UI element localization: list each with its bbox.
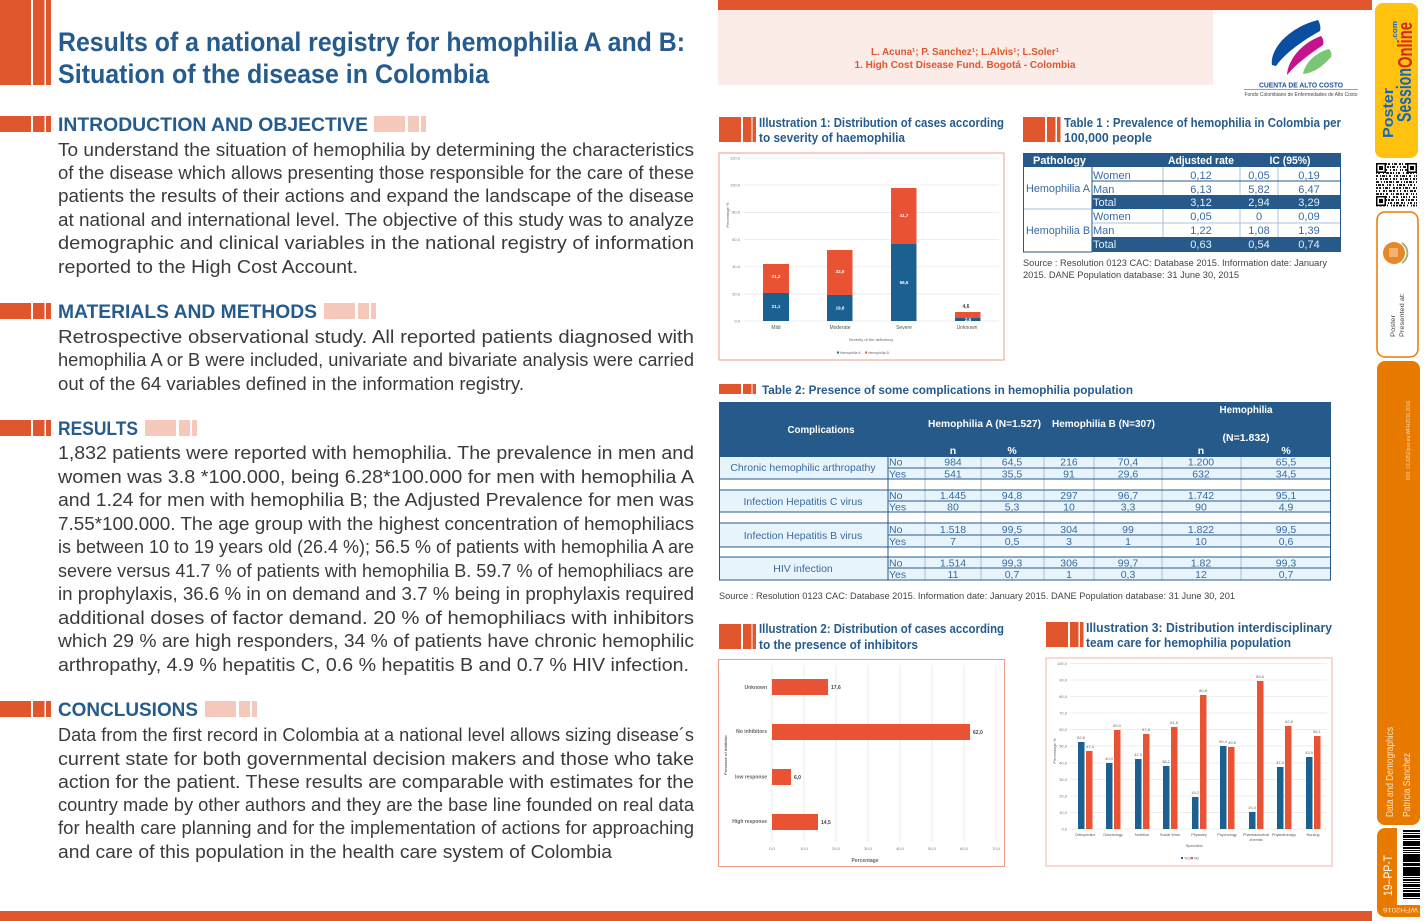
text block: results: 1,832 patients were reported with hemophilia. The prevalence in men and (58, 442, 694, 463)
table 1: prevalence: Women (1093, 170, 1131, 182)
heading: results: RESULTS (58, 418, 138, 440)
table 2: complications: 99,3 (1276, 558, 1296, 570)
table 2: complications: 304 (1060, 524, 1078, 536)
table 1: prevalence: 0,54 (1248, 239, 1270, 251)
heading: results (0, 418, 197, 440)
illustration 3: grouped bar chart: 38,2 (1162, 759, 1171, 764)
authors panel (718, 10, 1213, 85)
illustration 1: stacked bar chart: 120,0 (730, 156, 741, 160)
table 2: complications: 99 (1122, 524, 1134, 536)
text block: introduction: at national and international level. The objective of this study was to analyze (58, 209, 694, 230)
table 1: prevalence: Hemophilia A (1026, 183, 1091, 195)
table 2: complications: 12 (1195, 569, 1207, 581)
illustration 3: grouped bar chart: Social Work (1160, 833, 1180, 837)
table 2: complications: 64,5 (1002, 456, 1022, 468)
sidebar: session panel (1377, 361, 1420, 825)
table 2: complications: % (1281, 445, 1291, 457)
illustration 1: stacked bar chart: Mild (771, 325, 781, 331)
illustration 1: stacked bar chart: 21,2 (772, 274, 781, 279)
text block: materials and methods: hemophilia A or B were included, univariate and bivariate analysis were carried (58, 349, 694, 370)
illustration 3: grouped bar chart: Physiotherapy (1272, 833, 1296, 837)
table 2: complications: 3,3 (1121, 502, 1135, 514)
table 2: complications: 5,3 (1005, 502, 1019, 514)
table 2: complications: 91 (1063, 468, 1075, 480)
sidebar: presented at panel (1377, 212, 1418, 357)
sidebar: poster session online logo: Poster (1380, 88, 1397, 138)
table 1: prevalence: Man (1093, 225, 1114, 237)
table 2: complications: Yes (889, 569, 906, 581)
illustration 1: stacked bar chart (719, 153, 1004, 360)
illustration 1: stacked bar chart: 2,6 (965, 317, 972, 322)
table 2: complications: 1.200 (1188, 456, 1214, 468)
table 1: prevalence: 3,29 (1298, 197, 1320, 209)
table 2: complications: 1.822 (1188, 524, 1214, 536)
illustration 1: stacked bar chart: 100,0 (730, 182, 741, 188)
table 1: prevalence: Pathology (1033, 155, 1087, 167)
bars: hemophilia B (763, 188, 980, 318)
table 2: complications: 1.518 (940, 524, 966, 536)
bars: yes (1078, 742, 1312, 829)
table 2: complications: 1.514 (940, 558, 966, 570)
sidebar: session panel: DOI: 10.3252/pso.eu.WFH2016.2016 (1406, 401, 1412, 480)
table 2: complications: Chronic hemophilic arthropathy (730, 462, 876, 474)
illustration 1: stacked bar chart: 21,1 (772, 304, 781, 309)
illustration 3: grouped bar chart: 61,8 (1170, 720, 1179, 725)
table 2: complications: Hemophilia B (N=307) (1052, 418, 1155, 430)
illustration 3: grouped bar chart: Percentage % (1052, 738, 1057, 764)
illustration 1: stacked bar chart: 40,0 (732, 264, 741, 269)
heading: conclusions (0, 699, 257, 721)
sidebar: qr code (1376, 163, 1417, 206)
illustration 3: grouped bar chart: 60,0 (1059, 727, 1068, 732)
illustration 1: stacked bar chart: Moderate (829, 325, 851, 331)
illustration 2: horizontal bar chart: 6,0 (794, 775, 801, 781)
text block: materials and methods: Retrospective observational study. All reported patients diagnosed with (58, 326, 694, 347)
table 2: complications: 94,8 (1002, 490, 1022, 502)
section: conclusions (0, 699, 695, 862)
logo: cuenta de alto costo: CUENTA DE ALTO COSTO (1259, 80, 1343, 90)
table 2: complications (719, 402, 1331, 581)
table 2: source note: Source : Resolution 0123 CAC: Database 2015. Information date: January 2015. DANE Population database: 31 June 30, 201 (719, 591, 1235, 601)
table 2: complications: 99,3 (1002, 558, 1022, 570)
table 1: prevalence: 5,82 (1248, 184, 1270, 196)
sidebar: poster session online logo: Online (1395, 22, 1417, 68)
table 2: complications: No (889, 456, 903, 468)
illustration 3: grouped bar chart: YES (1184, 856, 1192, 860)
illustration 3: grouped bar chart: 100,0 (1057, 661, 1068, 666)
illustration 2: heading: to the presence of inhibitors (759, 638, 918, 652)
table 1: prevalence: 0,12 (1190, 170, 1212, 182)
illustration 1: stacked bar chart: Unknown (957, 325, 978, 331)
title decoration bars (0, 0, 51, 85)
table 2: complications: 80 (947, 502, 959, 514)
logo: cuenta de alto costo: Fondo Colombiano de Enfermedades de Alto Costo (1244, 92, 1358, 98)
text block: results: additional doses of factor demand. 20 % of hemophiliacs with inhibitors (58, 607, 694, 628)
table 2: complications: 95,1 (1276, 490, 1296, 502)
illustration 2: heading: Illustration 2: Distribution of cases according (759, 622, 1004, 636)
table 2: complications: No (889, 558, 903, 570)
table 1: prevalence: 0,05 (1248, 170, 1270, 182)
illustration 3: grouped bar chart: 40,0 (1105, 756, 1114, 761)
illustration 3: grouped bar chart: 89,6 (1256, 674, 1265, 679)
text block: introduction: To understand the situation of hemophilia by determining the characteristics (58, 139, 694, 160)
text block: conclusions: and care of this population in the health care system of Colombia (58, 841, 613, 862)
table 2: complications: 632 (1192, 468, 1210, 480)
table 2: complications: % (1007, 445, 1017, 457)
illustration 3: grouped bar chart: 80,8 (1199, 688, 1208, 693)
table 2: complications: 90 (1195, 502, 1207, 514)
table 2: complications: 3 (1066, 536, 1072, 548)
section: introduction and objective (0, 114, 694, 277)
illustration 3: grouped bar chart: 37,4 (1276, 760, 1285, 765)
section: materials and methods (0, 301, 694, 394)
table 1: prevalence: Man (1093, 184, 1114, 196)
illustration 2: horizontal bar chart: 10,0 (800, 846, 809, 851)
bars: no (1086, 681, 1320, 829)
illustration 2: horizontal bar chart: 0,0 (769, 846, 776, 851)
table 2: complications: 99,7 (1118, 558, 1138, 570)
text block: introduction (58, 139, 694, 277)
table 2: heading: Table 2: Presence of some complications in hemophilia population (762, 383, 1133, 397)
table 2: complications: 1 (1066, 569, 1072, 581)
table 2: complications: n (1198, 445, 1204, 457)
illustration 2: horizontal bar chart: Unknown (744, 685, 767, 691)
table 1: prevalence: IC (95%) (1270, 155, 1311, 167)
text block: conclusions: for health care planning and for the implementation of actions for approaching (58, 817, 694, 838)
illustration 3: grouped bar chart: Physiatry (1191, 833, 1207, 837)
table 1: source note (1023, 258, 1328, 280)
illustration 2: horizontal bar chart (718, 660, 1004, 866)
illustration 3: grouped bar chart: 56,1 (1313, 729, 1322, 734)
illustration 3: grouped bar chart: 50,4 (1219, 739, 1228, 744)
illustration 2: horizontal bar chart: 62,0 (973, 730, 983, 736)
table 1: source note: 2015. DANE Population database: 31 June 30, 2015 (1023, 270, 1239, 280)
table 2: complications: 10 (1195, 536, 1207, 548)
table 2: complications: 7 (950, 536, 956, 548)
illustration 3: grouped bar chart: 20,0 (1059, 794, 1068, 798)
heading: materials and methods: MATERIALS AND METHODS (58, 301, 317, 323)
text block: results: which 29 % are high responders, 34 % of patients have chronic hemophilic (57, 630, 694, 651)
text block: conclusions: action for the patient. These results are comparable with estimates for the (58, 771, 694, 792)
text block: results: in prophylaxis, 36.6 % in on demand and 3.7 % being in prophylaxis required (58, 583, 694, 604)
bars: hemophilia A (763, 244, 980, 321)
table 2: complications: Yes (889, 502, 906, 514)
heading: conclusions: CONCLUSIONS (58, 699, 198, 721)
text block: conclusions (58, 724, 695, 862)
table 2: complications: 297 (1060, 490, 1078, 502)
illustration 2: horizontal bar chart: 50,0 (928, 846, 937, 851)
text block: materials and methods: out of the 64 variables defined in the information registry. (58, 373, 524, 394)
sidebar: poster session online logo: .com (1392, 21, 1399, 40)
illustration 1: stacked bar chart: 41,7 (900, 213, 909, 218)
table 1: prevalence: Hemophilia B (1026, 225, 1090, 237)
table 2: complications: n (950, 445, 956, 457)
table 2: complications: 70,4 (1118, 456, 1138, 468)
table 1: prevalence: 6,13 (1190, 184, 1212, 196)
illustration 1: stacked bar chart: 60,0 (732, 237, 741, 242)
table 1: prevalence: Total (1093, 239, 1116, 251)
text block: results: severe versus 41.7 % of patients with hemophilia B. 59.7 % of hemophiliacs are (58, 560, 694, 581)
logo: cuenta de alto costo (1244, 20, 1358, 98)
table 1: prevalence: 3,12 (1190, 197, 1212, 209)
table 2: complications: Yes (889, 468, 906, 480)
table 1: heading: Table 1 : Prevalence of hemophilia in Colombia per (1064, 116, 1341, 130)
table 2: complications: 1.742 (1188, 490, 1214, 502)
illustration 2: horizontal bar chart: Percentage (852, 858, 879, 864)
table 2: complications: 306 (1060, 558, 1078, 570)
illustration 2: horizontal bar chart: 14,5 (821, 820, 831, 826)
table 1: prevalence: 1,08 (1248, 225, 1270, 237)
sidebar: poster session online logo: Session (1394, 68, 1416, 122)
table 2: complications: 216 (1060, 456, 1078, 468)
illustration 1: stacked bar chart: 56,5 (900, 280, 909, 285)
icon: congress badge (1383, 242, 1407, 264)
illustration 2: horizontal bar chart: 60,0 (960, 846, 969, 851)
table 1: prevalence: 0,05 (1190, 211, 1212, 223)
authors panel: 1. High Cost Disease Fund. Bogotá - Colombia (854, 59, 1076, 71)
illustration 3: grouped bar chart: 43,9 (1305, 750, 1314, 755)
illustration 3: grouped bar chart: 30,0 (1059, 777, 1068, 782)
table 2: complications: HIV infection (773, 563, 833, 575)
text block: materials and methods (58, 326, 694, 394)
table 2: complications: 4,9 (1279, 502, 1293, 514)
table 2: complications: Yes (889, 536, 906, 548)
table 1: prevalence: 1,22 (1190, 225, 1212, 237)
table 1: heading: 100,000 people (1064, 131, 1152, 145)
table 2: complications: 1 (1125, 536, 1131, 548)
illustration 3: grouped bar chart: Specialist (1185, 843, 1203, 848)
authors panel: L. Acuna¹; P. Sanchez¹; L.Alvis¹; L.Soler¹ (871, 46, 1059, 58)
bars: inhibitor response (772, 679, 970, 830)
table 2: complications: 0,7 (1279, 569, 1293, 581)
section: results (0, 418, 695, 675)
table 1: prevalence (1023, 153, 1341, 252)
table 2: complications: 0,5 (1005, 536, 1019, 548)
illustration 3: grouped bar chart: 10,4 (1248, 805, 1257, 810)
illustration 3: heading: team care for hemophilia population (1086, 636, 1291, 650)
table 2: complications: Hemophilia A (N=1.527) (928, 418, 1041, 430)
table 2: complications: 99,5 (1276, 524, 1296, 536)
illustration 1: stacked bar chart: 19,8 (836, 306, 845, 310)
text block: results: arthropathy, 4.9 % hepatitis C, 0.6 % hepatitis B and 0.7 % HIV infection. (58, 654, 689, 675)
table 1: prevalence: 0,09 (1298, 211, 1320, 223)
illustration 1: stacked bar chart: 4,6 (963, 304, 970, 310)
illustration 3: grouped bar chart: 10,0 (1059, 810, 1068, 815)
illustration 3: grouped bar chart: 57,8 (1142, 727, 1151, 732)
illustration 1: stacked bar chart: Percentage % (725, 202, 730, 228)
illustration 2: horizontal bar chart: High response (732, 819, 767, 825)
table 1: prevalence: 0,63 (1190, 239, 1212, 251)
illustration 3: grouped bar chart: 40,0 (1059, 760, 1068, 766)
illustration 3: grouped bar chart: 0,0 (1061, 826, 1068, 832)
illustration 1: stacked bar chart: Hemophilia A (840, 351, 861, 355)
table 1: prevalence: 1,39 (1298, 225, 1320, 237)
illustration 1: heading: Illustration 1: Distribution of cases according (759, 116, 1004, 130)
illustration 3: heading (1046, 621, 1332, 650)
table 1: prevalence: 6,47 (1298, 184, 1320, 196)
bottom orange band (0, 911, 1372, 921)
illustration 1: stacked bar chart: 0,0 (734, 318, 741, 324)
illustration 3: grouped bar chart: 42,3 (1134, 752, 1143, 757)
text block: introduction: reported to the High Cost Account. (58, 256, 358, 277)
sidebar: poster id and barcode (1377, 828, 1420, 917)
table 2: complications: 11 (948, 569, 959, 581)
illustration 3: grouped bar chart: NO (1194, 856, 1200, 860)
table 2: complications: 99,5 (1002, 524, 1022, 536)
illustration 3: grouped bar chart: 47,4 (1086, 744, 1095, 749)
illustration 3: grouped bar chart: 60,0 (1113, 723, 1122, 728)
table 2: complications: 984 (944, 456, 962, 468)
table 2: complications: Complications (788, 424, 855, 436)
table 1: prevalence: 0 (1256, 211, 1262, 223)
table 2: complications: Hemophilia (1220, 404, 1273, 416)
sidebar: presented at panel: Presented at: (1399, 293, 1406, 337)
illustration 3: grouped bar chart: Odontology (1103, 833, 1123, 837)
text block: introduction: demographic and clinical variables in the national registry of information (58, 232, 694, 253)
illustration 1: stacked bar chart: 20,0 (732, 292, 741, 296)
table 2: complications: No (889, 524, 903, 536)
illustration 3: grouped bar chart: 80,0 (1059, 694, 1068, 699)
illustration 3: heading: Illustration 3: Distribution interdisciplinary (1086, 621, 1332, 635)
illustration 3: grouped bar chart: Nursing (1306, 833, 1320, 837)
text block: results: is between 10 to 19 years old (26.4 %); 56.5 % of patients with hemophilia A are (58, 536, 694, 557)
illustration 1: heading (719, 116, 1004, 145)
text block: results: and 1.24 for men with hemophilia B; the Adjusted Prevalence for men was (58, 489, 694, 510)
text block: introduction: patients the results of their actions and expand the landscape of the disease (58, 185, 694, 206)
illustration 3: grouped bar chart: 52,6 (1077, 735, 1086, 740)
title: Results of a national registry for hemophilia A and B: (58, 27, 685, 57)
heading: introduction and objective: INTRODUCTION AND OBJECTIVE (58, 114, 368, 136)
illustration 3: grouped bar chart: Orthopedics (1075, 833, 1095, 837)
illustration 1: stacked bar chart: 32,6 (836, 269, 845, 274)
table 1: prevalence: Total (1093, 197, 1116, 209)
heading: materials and methods (0, 301, 376, 323)
table 1: prevalence: 2,94 (1248, 197, 1270, 209)
illustration 2: horizontal bar chart: 17,6 (831, 685, 841, 691)
table 2: complications: 0,7 (1005, 569, 1019, 581)
text block: results: women was 3.8 *100.000, being 6.28*100.000 for men with hemophilia A (57, 466, 695, 487)
table 2: complications: (N=1.832) (1222, 432, 1270, 444)
sidebar: presented at panel: Poster (1390, 314, 1397, 337)
top orange band (718, 0, 1372, 10)
illustration 3: grouped bar chart: Psychology (1217, 833, 1237, 837)
illustration 2: heading (719, 622, 1004, 652)
text block: conclusions: Data from the first record in Colombia at a national level allows sizing disease´s (58, 724, 694, 745)
sidebar: poster session online logo (1375, 3, 1418, 158)
title: Situation of the disease in Colombia (58, 59, 490, 89)
text block: results: 7.55*100.000. The age group with the highest concentration of hemophiliacs (58, 513, 694, 534)
illustration 1: stacked bar chart: Severity of the deficiency (849, 337, 893, 342)
table 2: complications: 65,5 (1276, 456, 1296, 468)
illustration 1: heading: to severity of haemophilia (759, 131, 906, 145)
illustration 1: stacked bar chart: Hemophilia B (868, 351, 889, 355)
illustration 2: horizontal bar chart: 40,0 (896, 846, 905, 851)
table 2: complications: 10 (1063, 502, 1075, 514)
table 2: complications: 1.82 (1191, 558, 1211, 570)
illustration 3: grouped bar chart: 90,0 (1059, 678, 1068, 682)
illustration 3: grouped bar chart: 70,0 (1059, 710, 1068, 716)
illustration 2: horizontal bar chart: low response (735, 774, 767, 780)
text block: conclusions: country made by other authors and they are the base line founded on real data (58, 794, 695, 815)
table 1: source note: Source : Resolution 0123 CAC: Database 2015. Information date: January (1023, 258, 1328, 268)
sidebar: poster id and barcode: 19–PP-T (1381, 854, 1395, 896)
table 2: complications: 1.445 (940, 490, 966, 502)
illustration 2: horizontal bar chart: No inhibitors (736, 729, 767, 735)
illustration 1: stacked bar chart: Severe (896, 325, 912, 331)
table 1: prevalence: 0,74 (1298, 239, 1320, 251)
table 1: prevalence: 0,19 (1298, 170, 1320, 182)
sidebar: poster id and barcode: WFH2016 (1383, 906, 1418, 913)
illustration 3: grouped bar chart: Pharmaceutical (1243, 833, 1269, 837)
table 2: complications: 541 (944, 468, 962, 480)
text block: conclusions: current state for both governmental decision makers and those who take (58, 748, 694, 769)
table 2: complications: 0,3 (1121, 569, 1135, 581)
illustration 2: horizontal bar chart: Presence of inhibitor (723, 735, 728, 775)
table 2: complications: No (889, 490, 903, 502)
illustration 1: stacked bar chart: 80,0 (732, 210, 741, 214)
table 2: complications: Infection Hepatitis B virus (744, 530, 862, 542)
table 2: complications: 0,6 (1279, 536, 1293, 548)
illustration 3: grouped bar chart: Nutrition (1135, 833, 1149, 837)
illustration 3: grouped bar chart (1046, 658, 1332, 866)
sidebar: session panel: Data and Demographics (1385, 727, 1396, 817)
table 1: prevalence: Women (1093, 211, 1131, 223)
title (58, 27, 685, 89)
table 2: complications: 34,5 (1276, 468, 1296, 480)
illustration 3: grouped bar chart: 50,0 (1059, 744, 1068, 748)
illustration 2: horizontal bar chart: 70,0 (992, 846, 1001, 851)
table 1: prevalence: Adjusted rate (1168, 155, 1234, 167)
table 2: complications: 96,7 (1118, 490, 1138, 502)
table 2: complications: 29,6 (1118, 468, 1138, 480)
illustration 3: grouped bar chart: 19,2 (1191, 790, 1200, 795)
illustration 3: grouped bar chart: chemist (1249, 838, 1263, 842)
table 2: complications: 35,5 (1002, 468, 1022, 480)
table 2: complications: Infection Hepatitis C virus (743, 496, 863, 508)
text block: results (57, 442, 695, 675)
illustration 3: grouped bar chart: 62,6 (1285, 719, 1294, 724)
table 1: heading (1023, 116, 1341, 145)
illustration 3: grouped bar chart: 49,6 (1228, 740, 1237, 745)
sidebar: session panel: Patricia Sanchez (1402, 753, 1413, 817)
illustration 2: horizontal bar chart: 30,0 (864, 846, 873, 851)
text block: introduction: of the disease which allows presenting those responsible for the care of these (58, 162, 694, 183)
illustration 2: horizontal bar chart: 20,0 (832, 846, 841, 851)
